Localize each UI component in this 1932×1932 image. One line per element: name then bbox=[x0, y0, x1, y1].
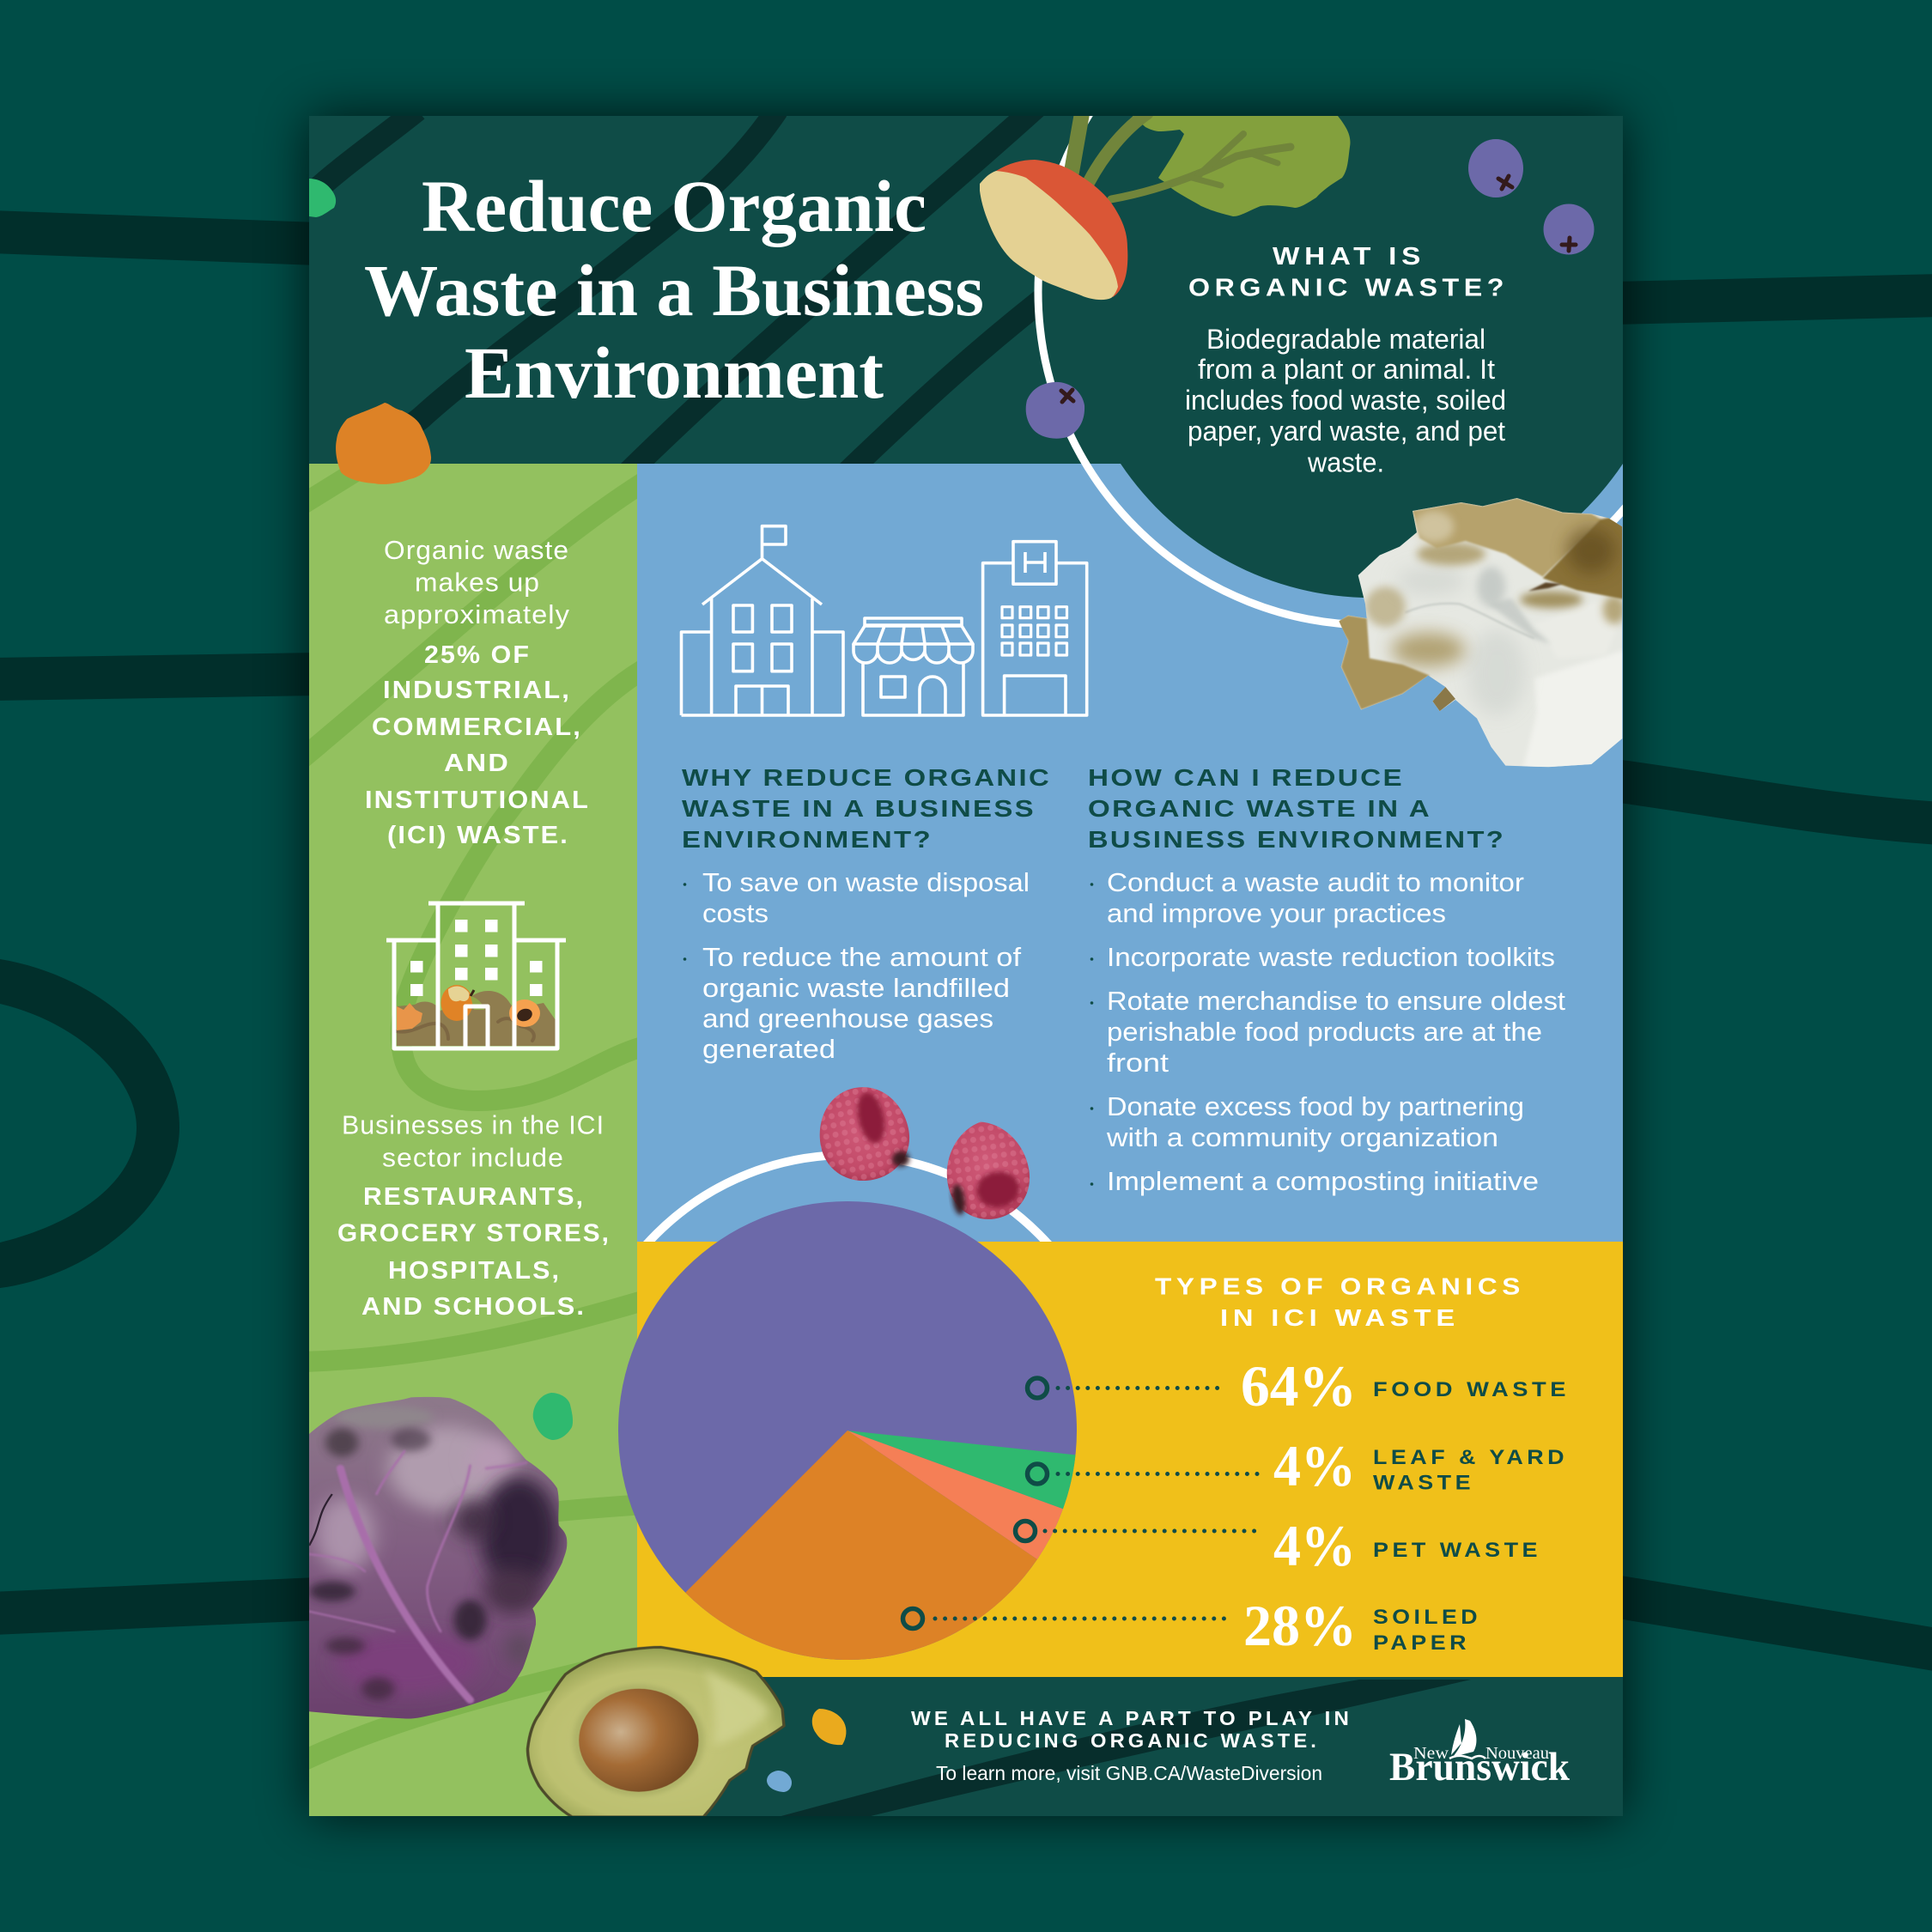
legend: leaf and yard waste: WASTE bbox=[1373, 1472, 1474, 1494]
column: why reduce bbox=[682, 764, 1051, 1064]
illustration: radish with leaf bbox=[980, 113, 1350, 300]
text: organic waste share: Organic waste bbox=[384, 535, 569, 565]
illustration: red cabbage bbox=[302, 1391, 579, 1723]
heading: what is organic waste: ORGANIC WASTE? bbox=[1188, 275, 1509, 302]
legend: pet waste: 4% bbox=[1273, 1513, 1356, 1578]
panel: footer bbox=[637, 1677, 1623, 1817]
text: ICI sector businesses: AND SCHOOLS. bbox=[361, 1293, 586, 1321]
heading: why reduce bbox=[682, 764, 1051, 853]
icon: shop bbox=[854, 618, 973, 715]
blob: yellow footer bbox=[812, 1709, 846, 1745]
legend: food waste: 64% bbox=[1241, 1353, 1357, 1419]
title: Reduce Organic bbox=[422, 165, 927, 247]
text: definition: paper, yard waste, and pet bbox=[1188, 416, 1505, 447]
icon: raspberry right bbox=[940, 1116, 1035, 1224]
text: footer message: To learn more, visit GNB.CA/WasteDiversion bbox=[936, 1762, 1322, 1784]
list: how to reduce bullets: Implement a composting initiative bbox=[1107, 1166, 1539, 1196]
icon: school bbox=[682, 526, 843, 715]
text: organic waste share bbox=[365, 535, 590, 849]
text: organic waste share: INDUSTRIAL, bbox=[383, 677, 571, 704]
legend: soiled paper bbox=[903, 1593, 1481, 1658]
heading: why reduce: WASTE IN A BUSINESS bbox=[682, 795, 1036, 822]
heading: what is organic waste: WHAT IS bbox=[1273, 243, 1425, 270]
list: why reduce bullets: To reduce the amount of bbox=[702, 942, 1021, 972]
column: how can I reduce bbox=[1088, 764, 1565, 1196]
heading: types of organics: TYPES OF ORGANICS bbox=[1155, 1273, 1525, 1300]
text: definition: from a plant or animal. It bbox=[1198, 354, 1495, 385]
list: why reduce bullets: and greenhouse gases bbox=[702, 1003, 993, 1034]
heading: types of organics: IN ICI WASTE bbox=[1220, 1304, 1460, 1331]
list: how to reduce bullets: front bbox=[1107, 1048, 1169, 1078]
illustration: soiled paper bbox=[1334, 489, 1625, 775]
icon: building on organic waste bbox=[386, 903, 566, 1048]
list: why reduce bullets bbox=[683, 867, 1030, 1064]
white ring bbox=[1034, 116, 1623, 629]
legend: leaf and yard waste: 4% bbox=[1273, 1433, 1356, 1498]
heading: how can I reduce bbox=[1088, 764, 1505, 853]
heading: how can I reduce: HOW CAN I REDUCE bbox=[1088, 764, 1404, 791]
icon: raspberry left bbox=[811, 1078, 917, 1189]
blob: green near cabbage bbox=[533, 1393, 573, 1440]
legend: leaf and yard waste bbox=[1027, 1433, 1568, 1498]
poster bbox=[309, 116, 1623, 1816]
title bbox=[365, 180, 982, 398]
slice: food waste 64% bbox=[618, 1201, 1077, 1660]
text: organic waste share: 25% OF bbox=[424, 641, 531, 669]
icon: blueberry right bbox=[1544, 204, 1594, 254]
slice: pet waste 4% bbox=[848, 1431, 1063, 1559]
text: organic waste share: makes up bbox=[415, 567, 540, 598]
legend: food waste: FOOD WASTE bbox=[1373, 1378, 1570, 1401]
list: how to reduce bullets: Conduct a waste audit to monitor bbox=[1107, 867, 1524, 897]
legend: food waste bbox=[1027, 1353, 1570, 1419]
text: organic waste share: (ICI) WASTE. bbox=[387, 822, 569, 849]
heading: why reduce: ENVIRONMENT? bbox=[682, 826, 933, 853]
blob: green header bbox=[309, 179, 336, 217]
list: why reduce bullets: costs bbox=[702, 898, 769, 928]
text: ICI sector businesses bbox=[337, 1109, 611, 1321]
heading: what is organic waste bbox=[1188, 243, 1509, 302]
list: how to reduce bullets: and improve your practices bbox=[1107, 898, 1446, 928]
heading: why reduce: WHY REDUCE ORGANIC bbox=[682, 764, 1051, 791]
heading: types of organics bbox=[1155, 1273, 1525, 1331]
title: Environment bbox=[465, 331, 884, 414]
text: organic waste share: AND bbox=[444, 750, 510, 777]
what is circle bbox=[1121, 464, 1623, 598]
pie chart: types of organics bbox=[618, 1201, 1077, 1660]
logo: New Brunswick: Nouveau bbox=[1485, 1744, 1549, 1763]
blob: orange header bbox=[336, 403, 431, 484]
logo: New Brunswick: New bbox=[1413, 1744, 1449, 1763]
legend: leaf and yard waste: LEAF & YARD bbox=[1373, 1446, 1568, 1469]
list: how to reduce bullets: Incorporate waste reduction toolkits bbox=[1107, 942, 1555, 972]
icon: blueberry top bbox=[1468, 139, 1523, 197]
text: definition bbox=[1185, 324, 1506, 477]
legend: soiled paper: SOILED bbox=[1373, 1606, 1481, 1629]
slice: soiled paper 28% bbox=[685, 1431, 1037, 1660]
text: ICI sector businesses: HOSPITALS, bbox=[388, 1257, 561, 1285]
text: ICI sector businesses: Businesses in the ICI bbox=[342, 1109, 605, 1140]
icon: blueberry on ring bbox=[1026, 382, 1084, 439]
list: why reduce bullets: organic waste landfilled bbox=[702, 973, 1010, 1003]
title: Waste in a Business bbox=[364, 249, 984, 331]
illustration: avocado half bbox=[527, 1647, 784, 1817]
icon: hospital bbox=[983, 542, 1087, 715]
panel: yellow chart background bbox=[637, 1242, 1623, 1677]
text: ICI sector businesses: GROCERY STORES, bbox=[337, 1219, 611, 1247]
pie halo ring bbox=[577, 1155, 1118, 1696]
logo: New Brunswick bbox=[1389, 1719, 1571, 1789]
text: organic waste share: approximately bbox=[384, 599, 570, 629]
panel: blue content bbox=[637, 464, 1623, 1242]
legend: pet waste: PET WASTE bbox=[1373, 1539, 1541, 1562]
list: how to reduce bullets: perishable food products are at the bbox=[1107, 1017, 1542, 1047]
heading: how can I reduce: ORGANIC WASTE IN A bbox=[1088, 795, 1431, 822]
legend: soiled paper: PAPER bbox=[1373, 1631, 1470, 1655]
blob: blue footer bbox=[767, 1771, 792, 1792]
text: definition: Biodegradable material bbox=[1206, 324, 1485, 355]
legend: soiled paper: 28% bbox=[1243, 1593, 1357, 1658]
text: organic waste share: INSTITUTIONAL bbox=[365, 787, 590, 814]
text: definition: waste. bbox=[1307, 447, 1384, 477]
logo: New Brunswick: Brunswick bbox=[1389, 1745, 1571, 1789]
list: why reduce bullets: To save on waste disposal bbox=[702, 867, 1030, 897]
slice: leaf and yard waste 4% bbox=[848, 1431, 1075, 1509]
text: ICI sector businesses: sector include bbox=[382, 1142, 564, 1173]
list: how to reduce bullets bbox=[1091, 867, 1565, 1196]
text: organic waste share: COMMERCIAL, bbox=[372, 714, 582, 741]
text: footer message: REDUCING ORGANIC WASTE. bbox=[945, 1729, 1320, 1752]
text: footer message: WE ALL HAVE A PART TO PLAY IN bbox=[911, 1707, 1352, 1729]
icon: school, shop and hospital bbox=[682, 526, 1087, 715]
heading: how can I reduce: BUSINESS ENVIRONMENT? bbox=[1088, 826, 1505, 853]
list: how to reduce bullets: Rotate merchandise to ensure oldest bbox=[1107, 986, 1565, 1016]
what is organic waste text bbox=[1185, 243, 1509, 477]
list: why reduce bullets: generated bbox=[702, 1034, 835, 1064]
panel: header bbox=[309, 116, 1623, 464]
text: footer message bbox=[911, 1707, 1352, 1784]
text: ICI sector businesses: RESTAURANTS, bbox=[363, 1183, 585, 1211]
text: definition: includes food waste, soiled bbox=[1185, 385, 1506, 416]
legend: pet waste bbox=[1015, 1513, 1541, 1578]
list: how to reduce bullets: with a community organization bbox=[1106, 1122, 1498, 1152]
panel: green sidebar bbox=[292, 462, 646, 1816]
list: how to reduce bullets: Donate excess food by partnering bbox=[1107, 1091, 1524, 1121]
